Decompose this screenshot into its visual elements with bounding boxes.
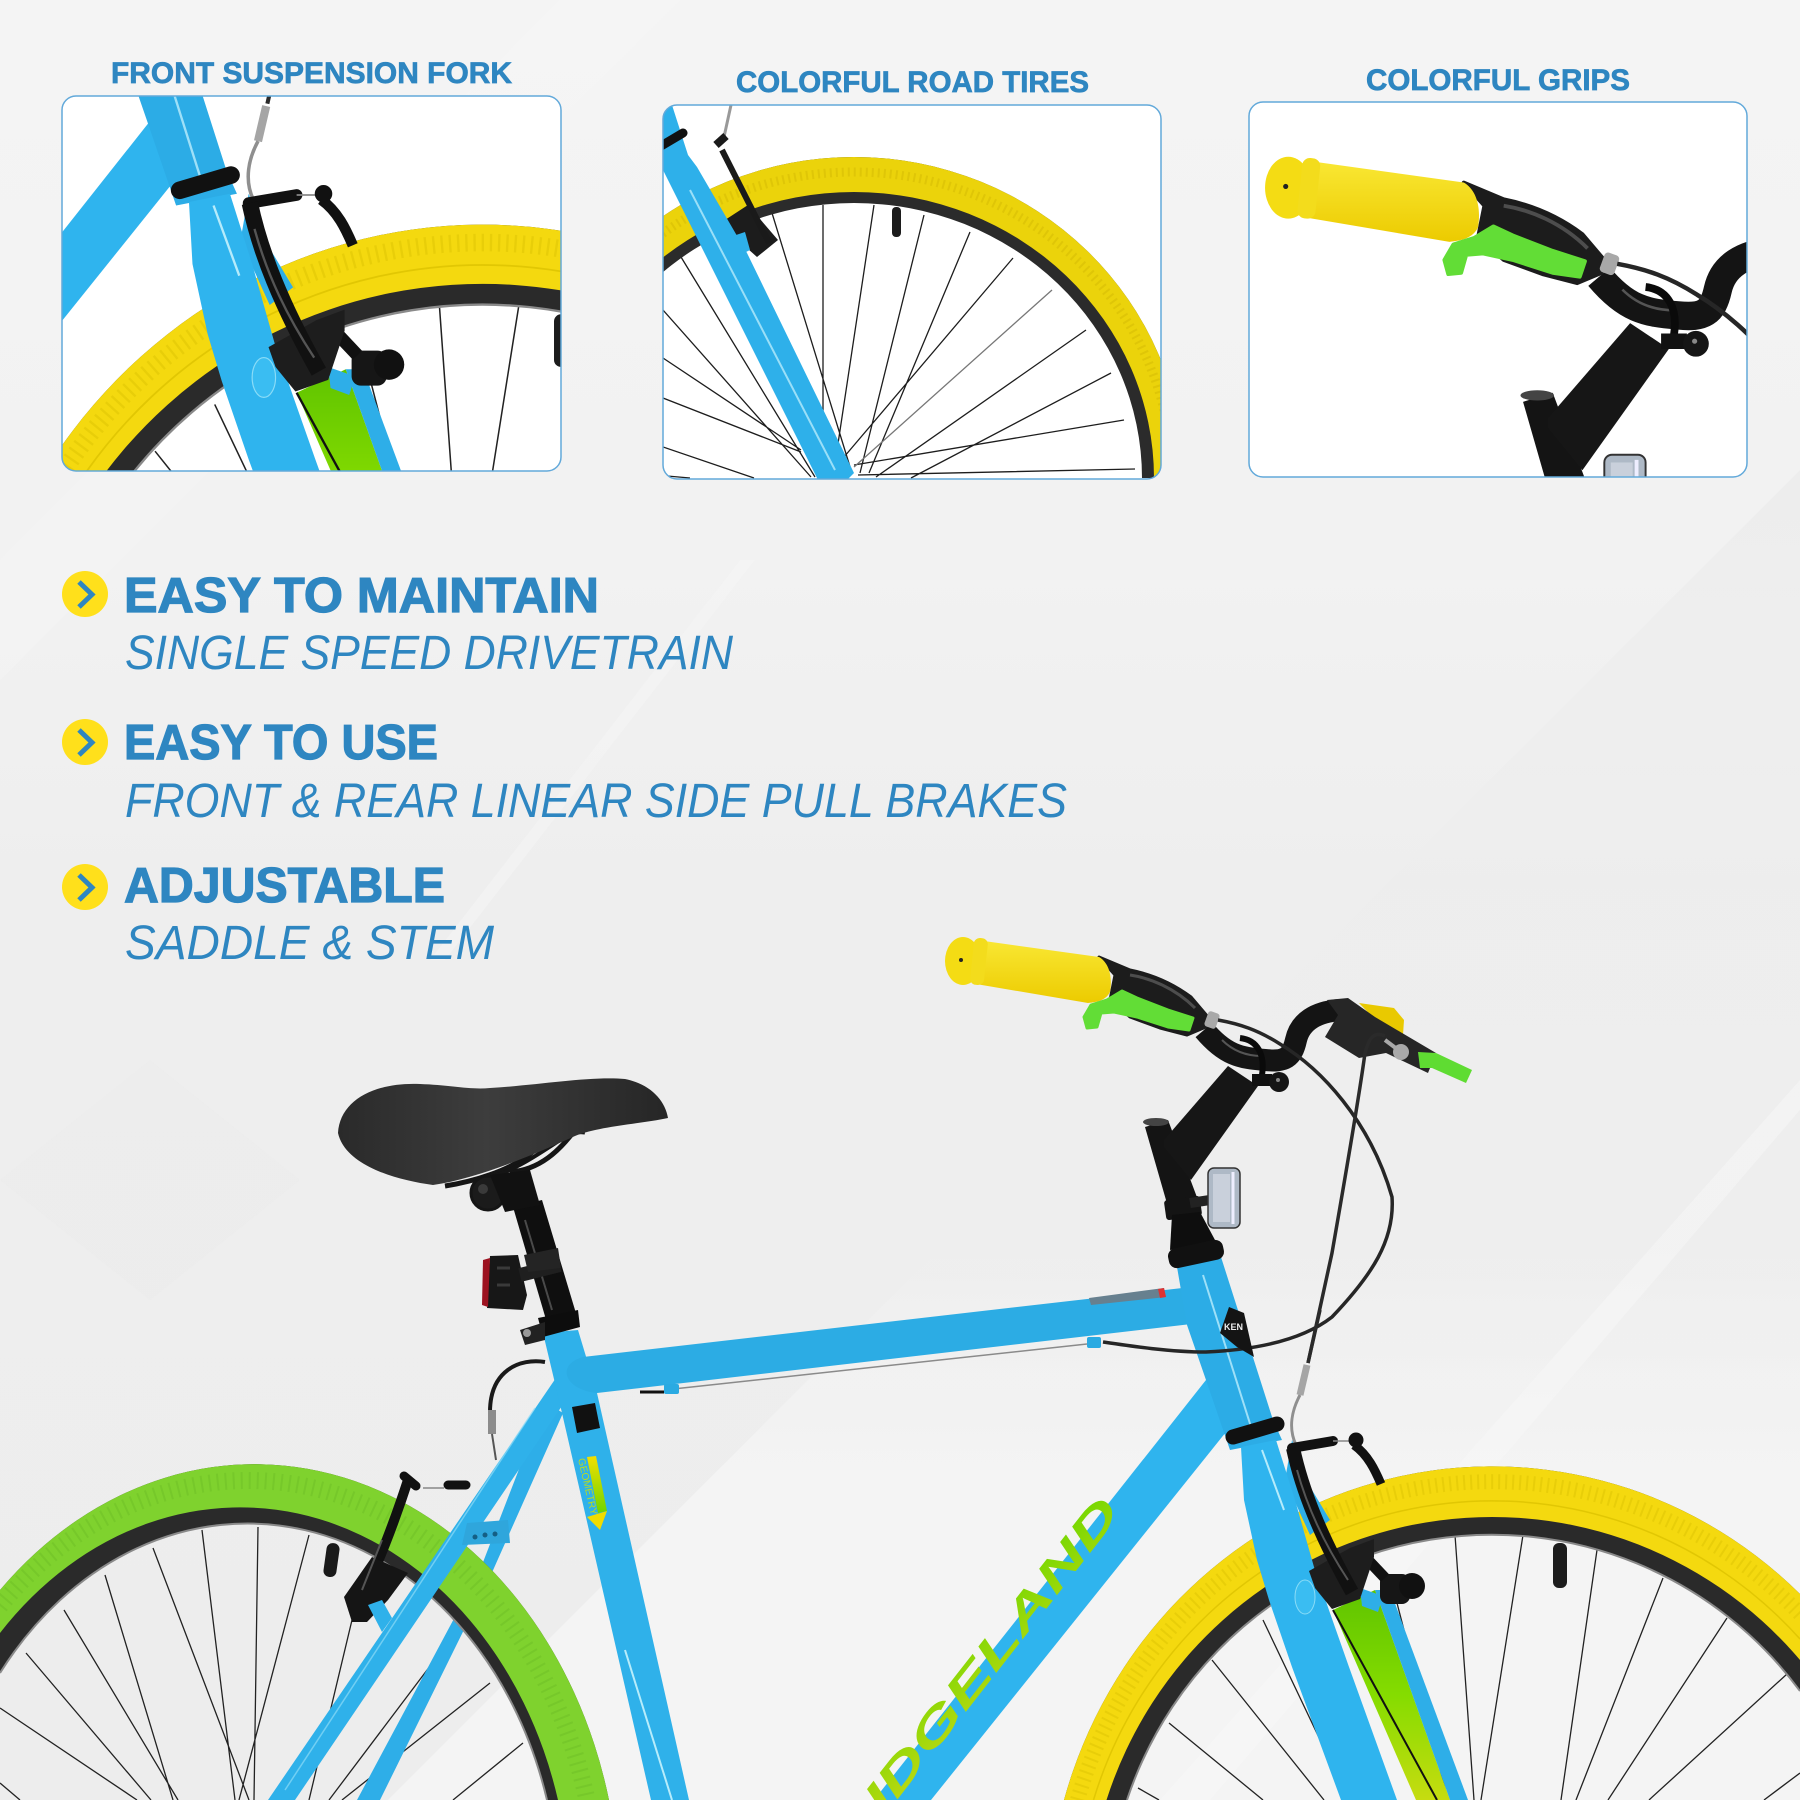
brake cable end — [1292, 1310, 1320, 1445]
description: SINGLE SPEED DRIVETRAIN — [125, 627, 733, 680]
stem clamp — [1164, 1196, 1202, 1220]
rear wheel valve — [323, 1542, 340, 1578]
rear brake block — [1360, 1560, 1425, 1612]
saddle rails and clamp — [445, 1130, 585, 1212]
stem bolt — [1252, 1072, 1289, 1092]
seat tube — [543, 1330, 689, 1800]
yellow front tire — [1064, 1466, 1800, 1800]
right ferrule nut — [1393, 1044, 1409, 1060]
heading: ADJUSTABLE — [124, 859, 445, 913]
handlebar highlight — [1222, 1040, 1262, 1056]
panel: front suspension fork — [61, 95, 562, 472]
head tube — [1177, 1257, 1282, 1450]
bullet icon — [62, 864, 108, 910]
seat band — [524, 1248, 561, 1272]
fork highlight — [1262, 1450, 1284, 1510]
down tube — [874, 1380, 1230, 1800]
brake arm and cable — [713, 106, 761, 220]
rear reflector — [482, 1255, 560, 1310]
heading: EASY TO USE — [124, 716, 438, 770]
kent badge — [1220, 1307, 1254, 1357]
green rear fork blade — [1333, 1590, 1450, 1800]
front wheel spokes — [1138, 1535, 1800, 1800]
fork blade — [663, 100, 854, 482]
grip collar — [970, 937, 988, 986]
seat post highlight — [525, 1220, 552, 1310]
right grip — [1359, 1003, 1404, 1035]
kent badge: KEN — [1224, 1322, 1243, 1332]
title: colorful road tires: COLORFUL ROAD TIRES — [736, 66, 1089, 99]
yellow tire — [664, 157, 1160, 476]
front end: wheel, fork and brake — [820, 1257, 1800, 1800]
rear tire tread — [0, 1480, 587, 1800]
rim edge — [1127, 1535, 1800, 1800]
title: front suspension fork: FRONT SUSPENSION FORK — [111, 57, 512, 90]
grip end cap — [945, 937, 981, 985]
saddle — [338, 1078, 668, 1185]
rim edge — [0, 1524, 547, 1800]
seat post — [513, 1200, 578, 1323]
front brake — [1292, 1433, 1381, 1609]
fork weld patch — [1295, 1580, 1315, 1614]
grip end hole — [959, 958, 963, 962]
feature: easy to use — [62, 716, 1067, 828]
blue edge of blade — [1375, 1590, 1468, 1800]
description: SADDLE & STEM — [125, 917, 494, 970]
bike photo illustration — [0, 937, 1800, 1800]
feature: adjustable — [62, 859, 494, 970]
upper blade behind brake — [1285, 1440, 1330, 1535]
blade dark line — [1333, 1610, 1437, 1800]
handlebar assembly — [945, 937, 1472, 1363]
rear chain stay — [357, 1408, 563, 1800]
rear wheel spokes — [0, 1527, 523, 1800]
seat tube highlight — [625, 1650, 672, 1800]
top tube sticker — [1089, 1288, 1166, 1305]
seat post clamp — [520, 1310, 580, 1345]
handlebar — [1204, 1010, 1340, 1060]
stem clamp band — [1240, 1038, 1263, 1075]
green rear tire — [0, 1464, 609, 1800]
heading: EASY TO MAINTAIN — [124, 569, 599, 623]
wheel rim — [664, 157, 1160, 478]
front wheel rim — [1064, 1466, 1800, 1800]
feature: easy to maintain — [62, 569, 733, 680]
brake block — [725, 205, 778, 257]
valve — [1553, 1543, 1567, 1588]
right cable ferrule — [1385, 1040, 1401, 1052]
description: FRONT & REAR LINEAR SIDE PULL BRAKES — [125, 775, 1067, 828]
steerer tube — [1145, 1120, 1198, 1207]
bullet icon — [62, 719, 108, 765]
fork stub — [736, 232, 750, 252]
lever highlight — [1130, 975, 1195, 1008]
front tire tread — [1078, 1482, 1800, 1800]
bullet icon — [62, 571, 108, 617]
stem — [1164, 1066, 1258, 1180]
panel: colorful grips — [1248, 101, 1748, 478]
title: colorful grips: COLORFUL GRIPS — [1366, 64, 1630, 97]
geometry decal: GEOMETRY — [575, 1457, 599, 1517]
reflector bracket — [1190, 1200, 1210, 1203]
fork collar — [661, 133, 683, 146]
rear brake cable — [488, 1361, 545, 1460]
panel: colorful road tires — [662, 104, 1162, 480]
brake lever body — [1099, 957, 1208, 1035]
rear brake — [344, 1476, 466, 1622]
geometry decal — [575, 1456, 607, 1530]
rear brake cable loop — [1308, 1034, 1385, 1363]
rear wheel rim — [0, 1464, 609, 1800]
right lever body — [1325, 998, 1436, 1073]
front tire sidewall line — [1094, 1501, 1800, 1800]
yellow grip — [976, 941, 1111, 1003]
fork collar — [1233, 1424, 1277, 1437]
head tube highlight — [1203, 1275, 1252, 1430]
green brake lever — [1084, 991, 1193, 1030]
steerer top cap — [1143, 1118, 1169, 1126]
cable ferrule — [1204, 1010, 1220, 1030]
spokes — [663, 205, 1135, 478]
right lever tip — [1418, 1052, 1472, 1083]
headset spacer — [1170, 1212, 1215, 1250]
seat stay and bridge — [268, 1372, 566, 1800]
valve — [892, 207, 901, 237]
frame sticker — [572, 1403, 600, 1433]
front brake cable — [1103, 1020, 1392, 1352]
headset ring — [1167, 1238, 1225, 1270]
front fork — [1241, 1440, 1397, 1800]
cable guide under top tube — [640, 1337, 1101, 1394]
front reflector — [1208, 1168, 1240, 1228]
tire tread — [664, 168, 1160, 411]
top tube — [567, 1286, 1200, 1393]
